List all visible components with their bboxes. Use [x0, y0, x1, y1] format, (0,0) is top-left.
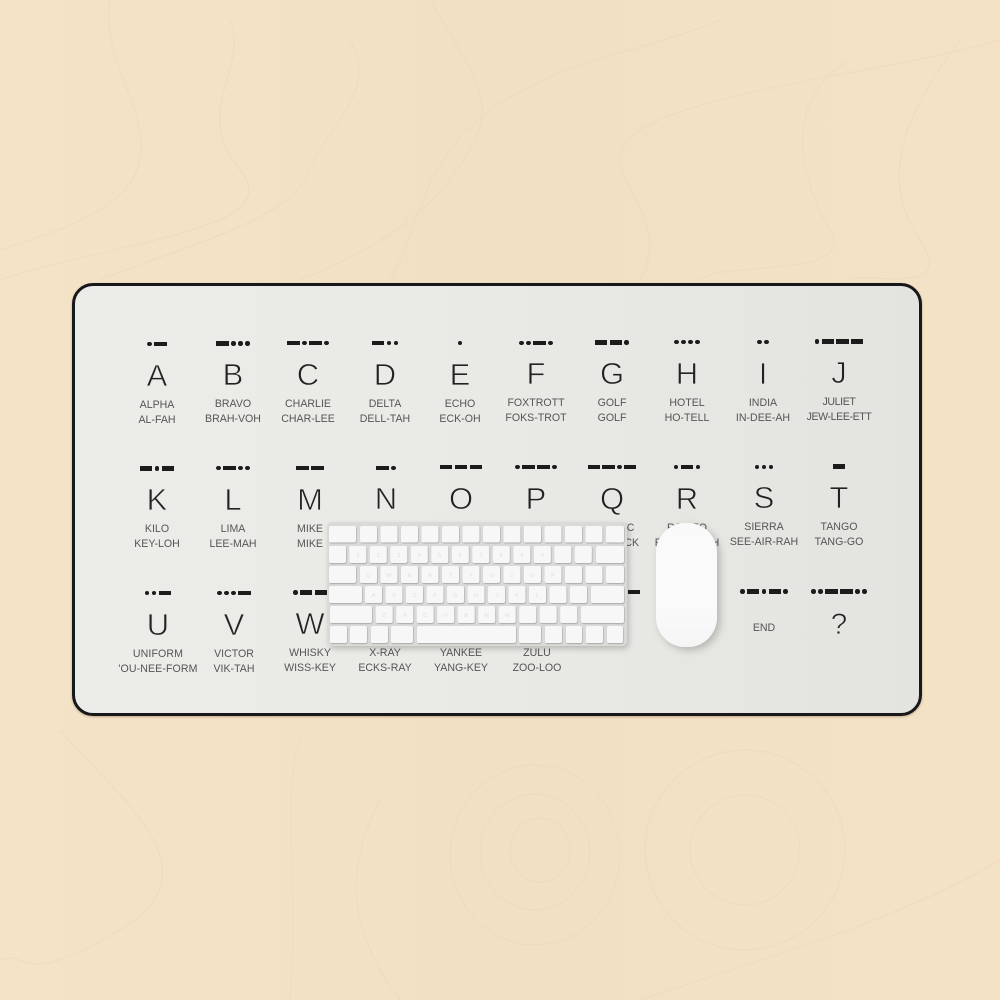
key legends: K	[515, 593, 519, 599]
cell: T	[779, 466, 899, 566]
morse K	[140, 466, 174, 471]
letter B: B	[223, 357, 243, 392]
cell: O	[401, 467, 521, 567]
cell: G	[595, 340, 629, 424]
label O	[401, 520, 521, 550]
morse O	[401, 465, 521, 469]
morse S	[704, 464, 824, 469]
morse B	[216, 341, 250, 346]
letter L: L	[224, 482, 242, 517]
label N: NOVEMBER	[356, 522, 416, 534]
key legends: W	[386, 573, 392, 579]
cell: U	[98, 593, 218, 693]
cell: S	[704, 467, 824, 567]
label U: 'OU-NEE-FORM	[118, 662, 198, 674]
key legends: E	[408, 573, 412, 579]
label A: AL-FAH	[138, 414, 176, 426]
label A	[138, 398, 176, 426]
letter R: R	[676, 481, 698, 516]
morse I	[757, 340, 769, 344]
key legends: L	[536, 593, 539, 599]
letter V: V	[224, 607, 244, 642]
letter E: E	[450, 357, 470, 392]
key legends: U	[490, 573, 494, 579]
label P: PAPA	[523, 522, 549, 534]
keyboard	[320, 515, 640, 655]
label F: FOXTROTT	[507, 397, 565, 409]
key legends: T	[449, 573, 453, 579]
letter I: I	[759, 356, 767, 391]
letter W: W	[295, 606, 325, 641]
key legends: Z	[382, 613, 386, 619]
label G: GOLF	[598, 412, 626, 424]
label T	[779, 520, 899, 550]
label Z: ZULU	[523, 647, 551, 659]
cell: question mark	[779, 592, 899, 692]
key legends: F	[433, 593, 437, 599]
cell: END	[704, 592, 824, 692]
label L: LEE-MAH	[209, 538, 257, 550]
label I	[736, 396, 790, 424]
label V	[174, 646, 294, 676]
label G: GOLF	[598, 397, 626, 409]
morse F	[519, 341, 553, 345]
cell: E	[439, 341, 481, 424]
key legends	[356, 553, 555, 619]
morse Q	[552, 465, 672, 469]
letter H: H	[676, 356, 698, 391]
cell: J	[806, 339, 872, 423]
cell: R	[627, 467, 747, 567]
cell: P	[476, 467, 596, 567]
label T: TANG-GO	[815, 536, 863, 548]
morse L	[216, 466, 250, 470]
label R: ROMEO	[667, 522, 707, 534]
morse U	[98, 591, 218, 595]
label C	[281, 398, 335, 424]
morse question mark	[779, 589, 899, 594]
label U: UNIFORM	[133, 648, 183, 660]
letter U: U	[147, 607, 169, 642]
morse N	[326, 466, 446, 470]
key legends: 2	[377, 553, 380, 559]
label Z: ZOO-LOO	[513, 662, 561, 674]
key legends: H	[474, 593, 478, 599]
label K: KILO	[145, 523, 169, 535]
cell: Q	[552, 467, 672, 567]
key legends: Y	[469, 573, 473, 579]
key legends: X	[403, 613, 407, 619]
letter question mark: ?	[831, 608, 847, 640]
letter O: O	[449, 481, 473, 516]
cell: A	[138, 342, 176, 426]
letter P: P	[526, 481, 546, 516]
label Y: YANKEE	[440, 647, 482, 659]
label Q: KEH-BECK	[585, 536, 639, 548]
label B: BRAH-VOH	[205, 413, 261, 425]
key legends: 6	[459, 553, 462, 559]
label R	[627, 520, 747, 550]
morse H	[674, 340, 700, 344]
cell: K	[134, 466, 180, 550]
letter C: C	[297, 357, 319, 392]
key legends: A	[372, 593, 376, 599]
key legends: B	[464, 613, 468, 619]
cell: C	[281, 341, 335, 424]
label M: MIKE	[297, 538, 323, 550]
key legends: P	[551, 573, 555, 579]
label Q: QUEBEC	[590, 522, 634, 534]
label T: TANGO	[821, 521, 857, 533]
key legends: R	[428, 573, 432, 579]
label H: HOTEL	[669, 396, 705, 408]
label I: IN-DEE-AH	[736, 412, 790, 424]
label O: OSCAR	[442, 522, 480, 534]
letter Q: Q	[600, 481, 624, 516]
key legends: J	[495, 593, 498, 599]
label C: CHAR-LEE	[281, 412, 335, 424]
morse fragment between keyboard and mouse	[628, 590, 640, 594]
label L: LIMA	[221, 522, 245, 534]
morse G	[595, 340, 629, 345]
cell: X	[325, 592, 445, 692]
label Y	[401, 646, 521, 676]
letter D: D	[374, 357, 396, 392]
label F: FOKS-TROT	[505, 412, 567, 424]
label W: WHISKY	[289, 647, 331, 659]
cell: I	[736, 340, 790, 424]
label N	[326, 521, 446, 551]
cell: L	[209, 466, 257, 550]
morse R	[627, 465, 747, 469]
label E	[439, 398, 481, 424]
label X: X-RAY	[369, 647, 401, 659]
label V: VICTOR	[214, 648, 254, 660]
cell: D	[360, 341, 410, 424]
key legends: 1	[356, 553, 360, 559]
key legends: C	[423, 613, 427, 619]
label X	[325, 646, 445, 676]
label J: JEW-LEE-ETT	[807, 411, 871, 423]
label M	[297, 522, 323, 550]
key legends: 4	[418, 553, 421, 559]
label V: VIK-TAH	[213, 662, 254, 674]
cell: F	[505, 341, 567, 424]
morse C	[287, 341, 329, 345]
label Z	[477, 646, 597, 676]
key legends: G	[453, 593, 458, 599]
key legends: D	[413, 593, 417, 599]
label W: WISS-KEY	[284, 662, 336, 674]
cell: N	[352, 466, 420, 549]
morse V	[174, 591, 294, 595]
letter S: S	[754, 480, 774, 515]
key legends: O	[530, 573, 535, 579]
key legends: N	[485, 613, 489, 619]
morse END	[704, 589, 824, 594]
label J	[806, 396, 872, 423]
cell: H	[665, 340, 710, 424]
key legends: 7	[479, 553, 482, 559]
cell: M	[296, 466, 324, 550]
panel: desk mat	[72, 283, 922, 716]
label N: NO-VEM-BER	[352, 537, 420, 549]
label K: KEY-LOH	[134, 538, 180, 550]
label B	[205, 398, 261, 425]
cell: V	[174, 593, 294, 693]
label B: BRAVO	[215, 398, 251, 410]
morse T	[779, 464, 899, 469]
label M: MIKE	[297, 522, 323, 534]
letter J: J	[831, 355, 847, 390]
cell: W	[250, 592, 370, 692]
morse A	[147, 342, 167, 346]
label F	[505, 397, 567, 424]
key legends: 9	[520, 553, 523, 559]
label H: HO-TELL	[665, 412, 709, 424]
label D: DELTA	[369, 398, 401, 410]
morse M	[296, 466, 324, 470]
label I: INDIA	[749, 396, 777, 408]
label L	[209, 522, 257, 550]
letter A: A	[147, 358, 167, 393]
key legends: 3	[397, 553, 400, 559]
cell: Y	[401, 592, 521, 692]
label A: ALPHA	[140, 398, 174, 410]
label K	[134, 523, 180, 550]
label G	[598, 397, 626, 424]
morse E	[458, 341, 462, 345]
key legends: Q	[366, 573, 371, 579]
mouse	[650, 515, 730, 660]
key legends: 5	[438, 553, 441, 559]
label C: CHARLIE	[285, 398, 331, 410]
letter K: K	[147, 482, 167, 517]
key legends: S	[392, 593, 396, 599]
label S	[704, 520, 824, 550]
key legends: 0	[541, 553, 544, 559]
label END: END	[753, 622, 775, 634]
label W	[250, 646, 370, 676]
cell: B	[205, 341, 261, 425]
letter N: N	[375, 481, 397, 516]
key legends: M	[505, 613, 510, 619]
label D: DELL-TAH	[360, 412, 410, 424]
letter T: T	[830, 480, 848, 515]
letter G: G	[600, 356, 624, 391]
morse P	[476, 465, 596, 469]
label S: SEE-AIR-RAH	[730, 536, 798, 548]
label Y: YANG-KEY	[434, 662, 488, 674]
morse J	[815, 339, 863, 344]
morse D	[372, 341, 398, 345]
letter F: F	[527, 356, 545, 391]
label O: OSS-CAH	[437, 536, 485, 548]
label U	[98, 646, 218, 676]
key legends: V	[444, 613, 448, 619]
cell: Z	[477, 592, 597, 692]
label J: JULIET	[823, 396, 855, 408]
label E: ECHO	[445, 398, 475, 410]
letter M: M	[297, 482, 323, 517]
label E: ECK-OH	[439, 412, 481, 424]
key legends: 8	[500, 553, 503, 559]
label X: ECKS-RAY	[358, 662, 412, 674]
label D	[360, 398, 410, 424]
label H	[665, 396, 710, 424]
label R: ROW-ME-OH	[655, 536, 719, 548]
label S: SIERRA	[744, 521, 784, 533]
key legends: I	[511, 573, 513, 579]
label P	[476, 520, 596, 550]
label Q	[552, 520, 672, 550]
label P: PAH-PAH	[513, 536, 559, 548]
morse W	[250, 590, 370, 595]
